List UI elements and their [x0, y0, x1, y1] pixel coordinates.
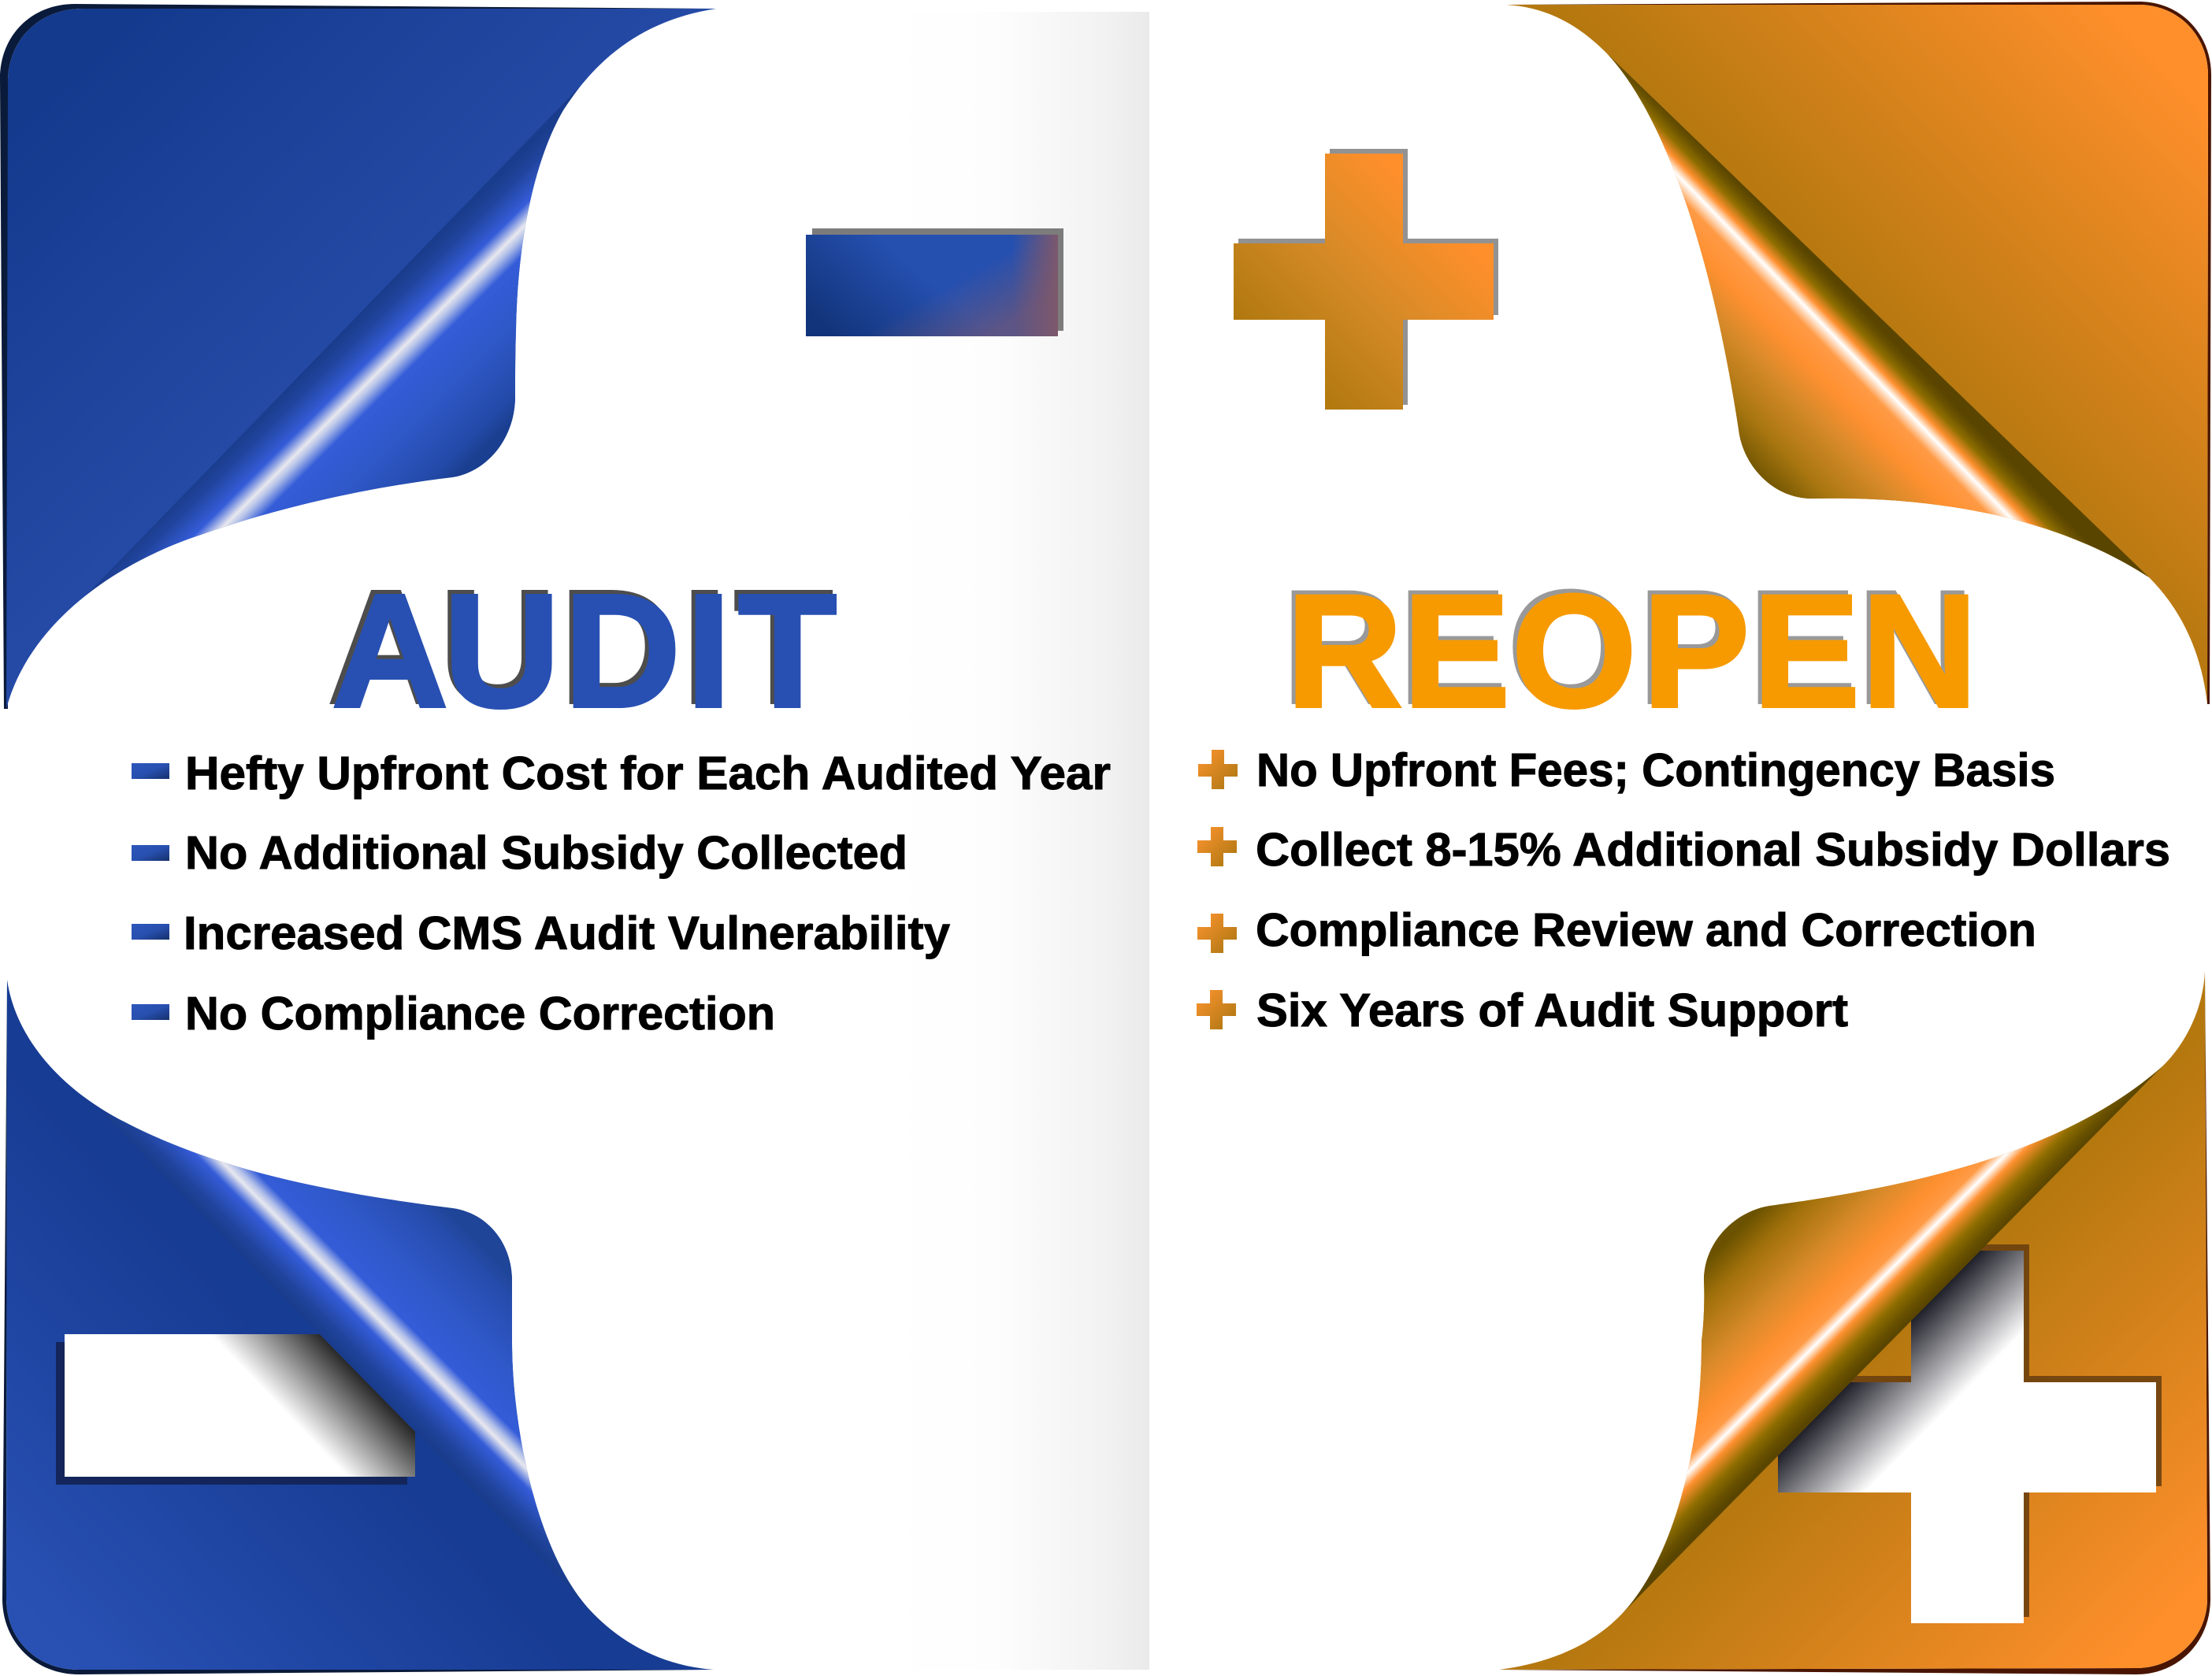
- bullet 2: audit: No Additional Subsidy Collected: [185, 827, 907, 879]
- top right page curl: [1606, 53, 2149, 577]
- bullet 2: reopen: Collect 8-15% Additional Subsidy Dollars: [1256, 824, 2170, 876]
- panel: bottom right orange corner: [1499, 971, 2210, 1674]
- icon: white plus cutout: [1778, 1244, 2162, 1623]
- panel: top left blue corner: [0, 4, 716, 709]
- heading: AUDIT: AUDIT: [332, 561, 837, 741]
- icon: large blue minus: [806, 228, 1063, 336]
- list: audit drawbacks: [132, 747, 1111, 1040]
- bullet 3: reopen: Compliance Review and Correction: [1256, 904, 2036, 956]
- panel: left page shading: [890, 12, 1149, 1670]
- top left page curl: [87, 87, 580, 595]
- icon: large orange plus: [1234, 149, 1498, 410]
- bullet 1: reopen: No Upfront Fees; Contingency Basis: [1256, 744, 2055, 796]
- list: reopen benefits: [1197, 744, 2170, 1036]
- heading: AUDIT: AUDIT: [328, 557, 833, 737]
- icon: white minus cutout: [56, 1334, 415, 1485]
- panel: top right orange corner: [1506, 2, 2211, 704]
- bullet 4: reopen: Six Years of Audit Support: [1256, 984, 1848, 1036]
- bullet 3: audit: Increased CMS Audit Vulnerability: [184, 907, 950, 959]
- heading: REOPEN: REOPEN: [1282, 558, 1973, 737]
- bottom right page curl: [1622, 1066, 2162, 1614]
- bottom left page curl: [98, 1109, 587, 1607]
- bullet 4: audit: No Compliance Correction: [185, 988, 775, 1040]
- heading: REOPEN: REOPEN: [1286, 562, 1977, 741]
- panel: bottom left blue corner: [2, 980, 714, 1674]
- bullet 1: audit: Hefty Upfront Cost for Each Audited Year: [185, 747, 1111, 799]
